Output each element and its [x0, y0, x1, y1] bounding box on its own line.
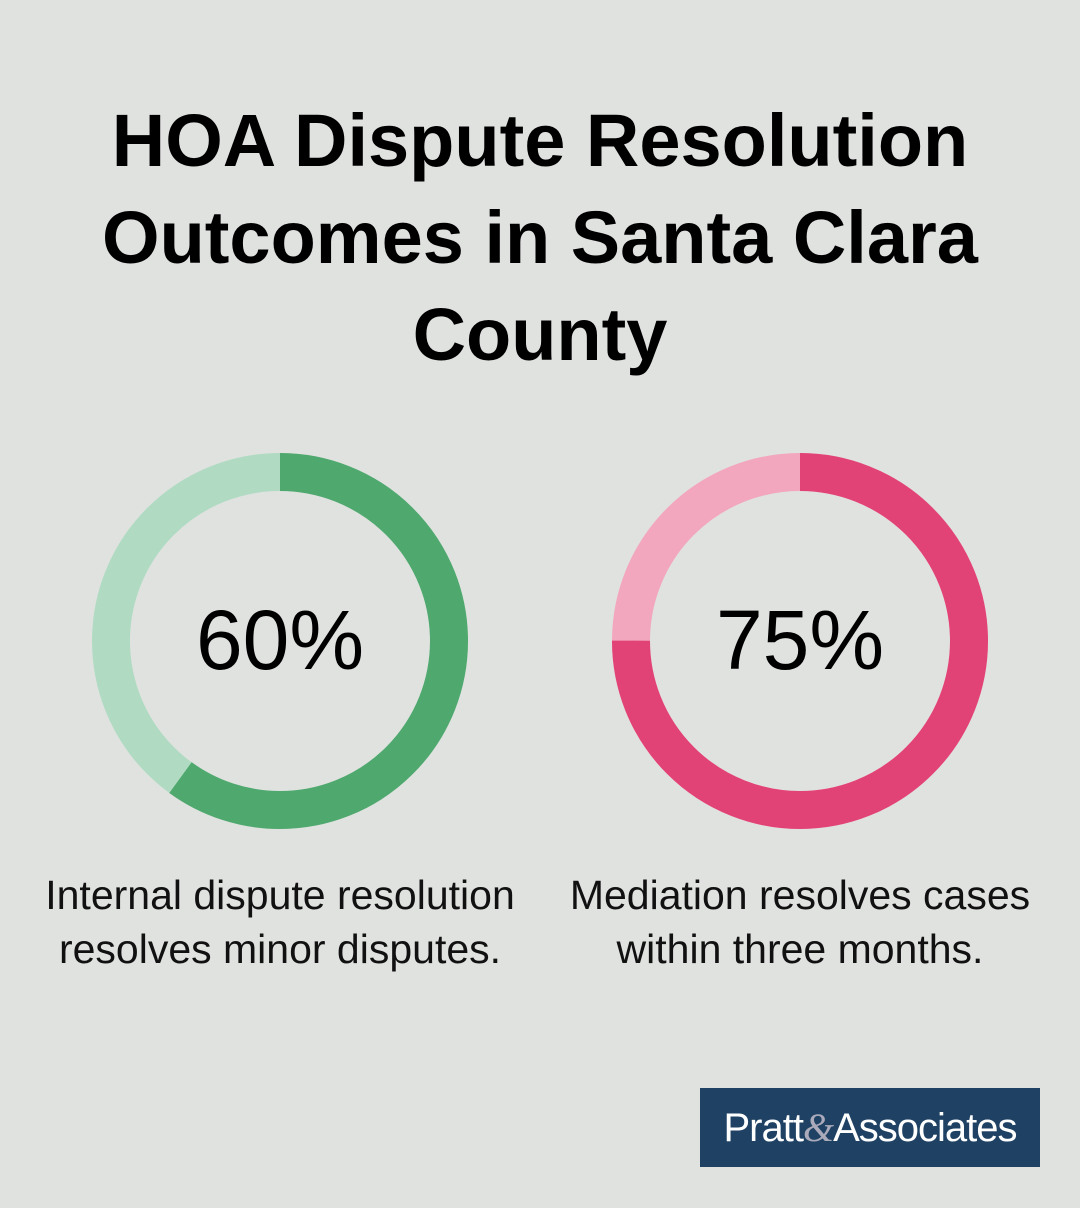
donut: 75%: 75%: [716, 593, 884, 687]
caption: left: Internal dispute resolution: [45, 872, 515, 918]
caption: right: within three months.: [617, 926, 983, 972]
logo: [700, 1088, 1040, 1167]
donut: 60%: 60%: [196, 593, 364, 687]
caption: left: resolves minor disputes.: [59, 926, 501, 972]
title: Outcomes in Santa Clara: [102, 196, 978, 279]
donut: 60%: [111, 472, 449, 810]
caption: right: [570, 872, 1030, 972]
title: County: [413, 293, 667, 376]
donut: 75%: [631, 472, 969, 810]
title: [102, 99, 978, 376]
title: HOA Dispute Resolution: [112, 99, 968, 182]
logo: Pratt&Associates: [723, 1105, 1017, 1150]
caption: right: Mediation resolves cases: [570, 872, 1030, 918]
caption: left: [45, 872, 515, 972]
